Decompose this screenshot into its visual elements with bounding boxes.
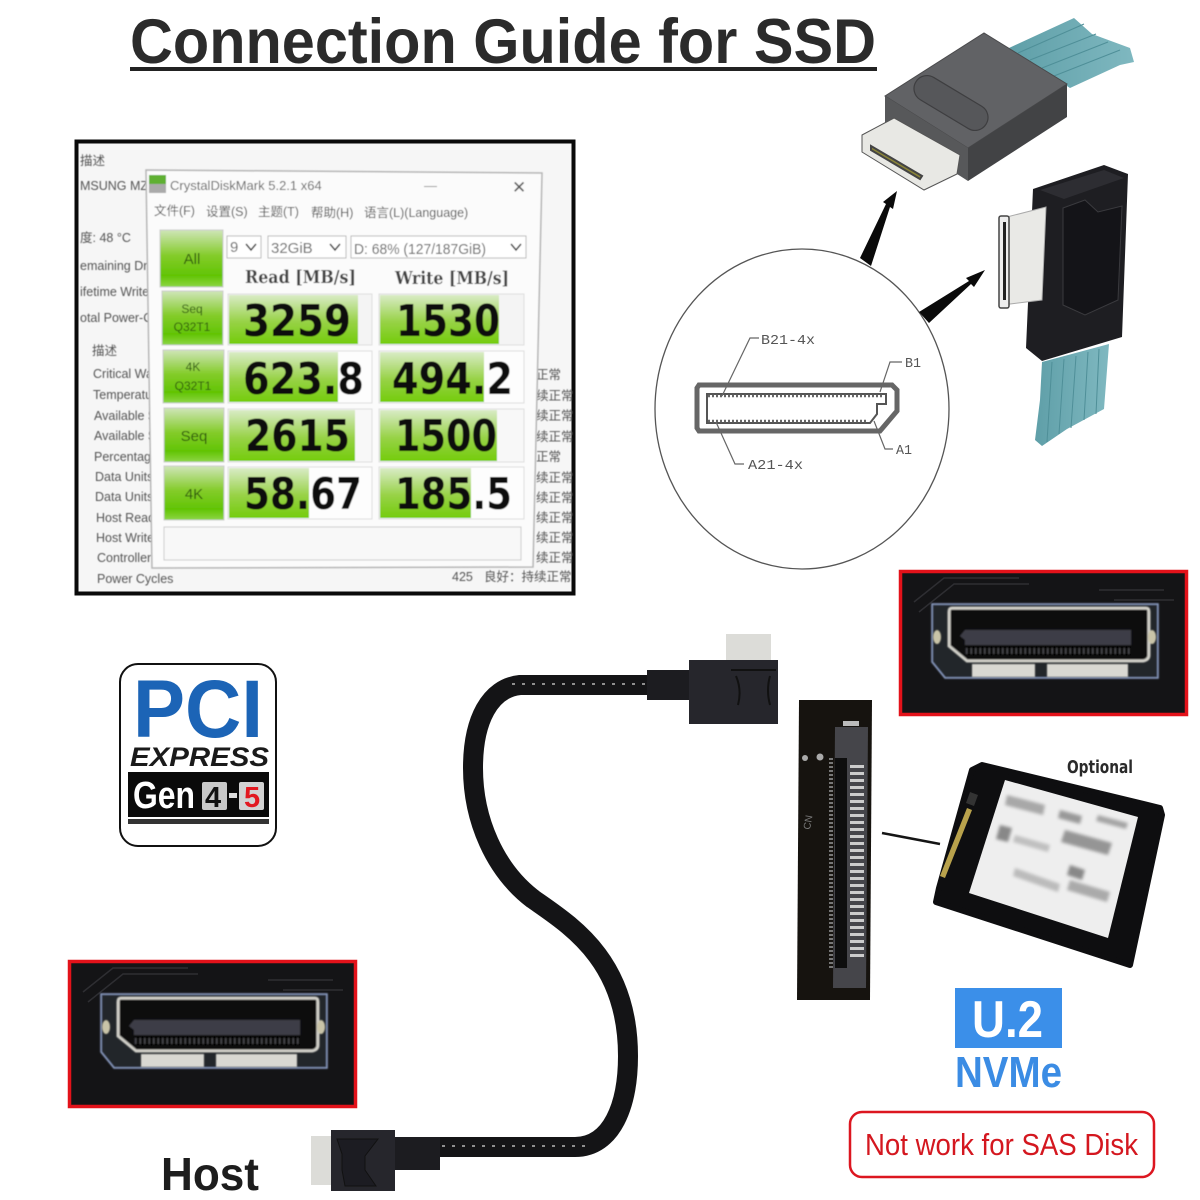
read results: 3259: [243, 296, 351, 347]
U.2 SFF adapter board: [797, 700, 872, 1000]
background drive information text: 描述: [92, 344, 118, 358]
background drive information text: Controller: [97, 551, 151, 565]
U.2 badge: U.2: [972, 991, 1043, 1049]
arrow to straight connector: [860, 191, 897, 266]
background drive information text: 良好：持续正常: [484, 569, 572, 584]
background drive information text: emaining Dri: [80, 259, 150, 273]
metal tongue: [1002, 207, 1046, 305]
recessed oval latch: [909, 71, 993, 135]
row buttons: Seq: [181, 302, 203, 316]
read results: [228, 294, 372, 520]
write results: 185.5: [395, 469, 512, 520]
PCI Express Gen 4-5 badge: Gen: [133, 775, 195, 817]
background drive information text: 续正常: [536, 430, 574, 444]
background drive information text: MSUNG MZV: [80, 179, 157, 193]
panel: CrystalDiskMark benchmark screenshot: [76, 142, 574, 594]
NVMe label: NVMe: [955, 1048, 1062, 1097]
background drive information text: Available S: [94, 429, 156, 443]
write results: 494.2: [392, 354, 513, 405]
teal ribbon cable: [1035, 344, 1109, 446]
background drive information text: 425: [452, 570, 473, 584]
pin labels: [748, 333, 921, 474]
teal ribbon cable: [1009, 18, 1134, 88]
background drive information text: [80, 154, 574, 586]
optional label: Optional: [1067, 757, 1133, 778]
motherboard port photo: host side: [70, 962, 356, 1106]
braid highlights: [442, 684, 646, 1146]
top right-angle plug: [647, 634, 778, 724]
CrystalDiskMark window: 文件(F): [154, 203, 195, 218]
background drive information text: 度: 48 °C: [80, 230, 131, 245]
row buttons: Q32T1: [174, 320, 211, 334]
write results: [379, 294, 524, 520]
U.2 SFF adapter board: CN: [802, 814, 815, 831]
CrystalDiskMark window: 语言(L)(Language): [364, 206, 468, 220]
background drive information text: 正常: [536, 368, 561, 382]
CrystalDiskMark window: 设置(S): [206, 204, 248, 219]
PCI Express Gen 4-5 badge: EXPRESS: [130, 742, 269, 772]
title: Connection Guide for SSD: [130, 7, 876, 77]
host label: Host: [161, 1148, 259, 1200]
background drive information text: 续正常: [536, 471, 574, 485]
pin labels: B21-4x: [761, 333, 815, 349]
drive label details: [996, 795, 1128, 902]
pin labels: B1: [905, 356, 921, 372]
CrystalDiskMark window: —: [424, 178, 437, 193]
background drive information text: Data Units: [95, 470, 153, 484]
pin labels: A1: [896, 443, 912, 459]
row buttons: Q32T1: [175, 379, 212, 393]
pin labels: A21-4x: [748, 458, 803, 474]
write results: 1500: [395, 411, 497, 462]
connector pinout circle diagram: [655, 249, 949, 569]
braided cable with connectors: [311, 634, 778, 1191]
connection line from board to SSD: [882, 833, 940, 844]
row buttons: Seq: [181, 428, 207, 445]
background drive information text: ifetime Write: [80, 285, 149, 299]
PCI Express Gen 4-5 badge: 4: [205, 782, 221, 814]
plug body: [885, 33, 1067, 148]
black housing: [1026, 165, 1128, 361]
CrystalDiskMark window: Read [MB/s]: [245, 267, 356, 288]
bottom straight plug: [311, 1130, 440, 1191]
PCI Express Gen 4-5 badge: 5: [244, 782, 260, 814]
row buttons: 4K: [185, 486, 203, 503]
PCI Express Gen 4-5 badge: [120, 664, 276, 846]
connector outline: [697, 338, 902, 464]
background drive information text: Critical Wa: [93, 367, 153, 381]
CrystalDiskMark window: 32GiB: [271, 240, 313, 257]
row buttons: [160, 230, 224, 520]
CrystalDiskMark window: 9: [230, 239, 238, 256]
read results: 2615: [245, 411, 350, 462]
right-angle oculink connector illustration: [999, 165, 1128, 446]
background drive information text: Data Units: [95, 490, 153, 504]
row buttons: 4K: [186, 360, 200, 374]
row buttons: All: [184, 251, 200, 268]
background drive information text: otal Power-C: [80, 311, 152, 325]
read results: 623.8: [243, 354, 364, 405]
metal tongue: [862, 118, 960, 190]
background drive information text: Host Write: [96, 531, 154, 545]
warning callout: [850, 1112, 1154, 1177]
read results: 58.67: [244, 469, 362, 520]
CrystalDiskMark window: CrystalDiskMark 5.2.1 x64: [170, 178, 322, 193]
background drive information text: Percentage: [94, 450, 158, 464]
background drive information text: Host Read: [96, 511, 155, 525]
straight oculink connector illustration: [862, 18, 1134, 190]
CrystalDiskMark window: 主题(T): [258, 205, 299, 219]
SSD drive photo: [936, 765, 1162, 965]
arrow to angled connector: [919, 270, 985, 323]
background drive information text: 描述: [80, 154, 106, 168]
background drive information text: 正常: [536, 450, 561, 464]
CrystalDiskMark window: 帮助(H): [311, 206, 353, 220]
CrystalDiskMark window: [146, 170, 542, 568]
write results: 1530: [396, 296, 500, 347]
SATA edge connector: [940, 808, 972, 878]
CrystalDiskMark window: D: 68% (127/187GiB): [354, 241, 486, 258]
background drive information text: 续正常: [536, 531, 574, 545]
cable body: [440, 685, 650, 1147]
warning callout: Not work for SAS Disk: [865, 1127, 1138, 1162]
background drive information text: 续正常: [536, 551, 574, 565]
background drive information text: Power Cycles: [97, 572, 173, 586]
CrystalDiskMark window: ✕: [512, 178, 526, 197]
background drive information text: Temperatu: [93, 388, 152, 402]
background drive information text: 续正常: [536, 511, 574, 525]
CrystalDiskMark window: Write [MB/s]: [394, 268, 509, 289]
background drive information text: 续正常: [536, 389, 574, 403]
motherboard port photo: device side: [900, 572, 1186, 714]
PCI Express Gen 4-5 badge: PCI: [133, 664, 263, 755]
background drive information text: 续正常: [536, 409, 574, 423]
background drive information text: Available S: [94, 409, 156, 423]
background drive information text: 续正常: [536, 491, 574, 505]
